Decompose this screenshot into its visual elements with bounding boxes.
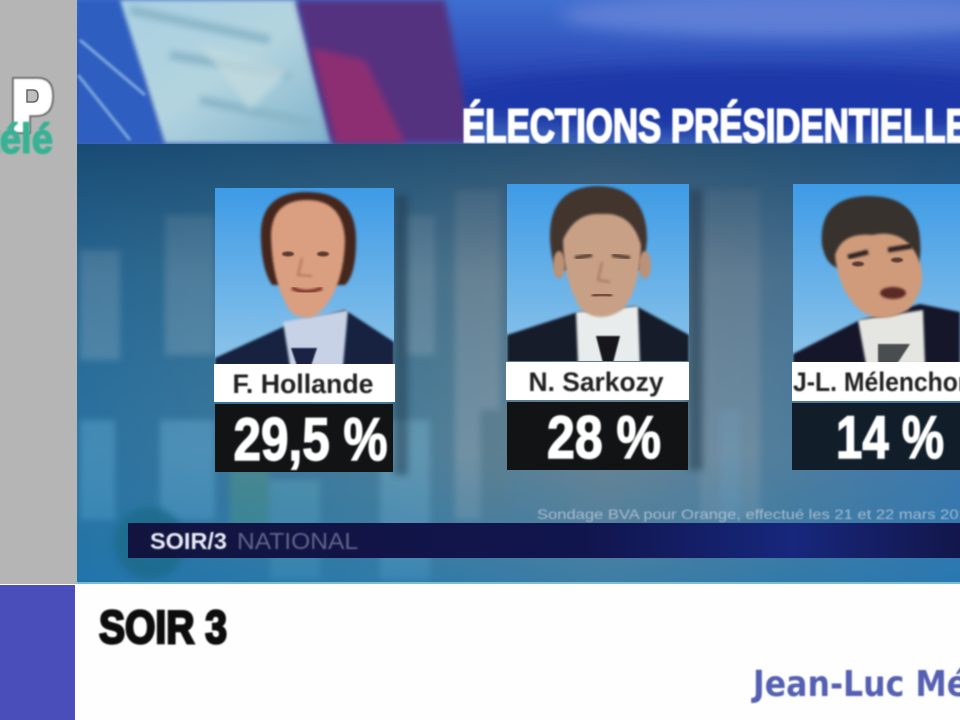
name label xyxy=(506,362,689,400)
sidebar: grey panel xyxy=(0,0,77,584)
panel: building backdrop xyxy=(77,144,960,584)
logo: site logo fragment xyxy=(0,78,53,162)
percentage xyxy=(792,403,960,470)
sidebar: blue panel xyxy=(0,585,75,720)
card: Nicolas Sarkozy: N. Sarkozy xyxy=(528,367,664,397)
card: François Hollande xyxy=(214,188,395,473)
portrait: Mélenchon xyxy=(793,184,960,364)
percentage xyxy=(215,404,393,472)
portrait: Sarkozy xyxy=(507,184,689,363)
heading: Soir 3: SOIR 3 xyxy=(99,601,227,653)
footer panel xyxy=(75,584,960,720)
ticker bar: Soir 3 National xyxy=(128,523,960,558)
card: Jean-Luc Mélenchon xyxy=(792,184,960,471)
ticker bar: Soir 3 National: NATIONAL xyxy=(237,528,358,554)
name label xyxy=(792,362,960,401)
name label xyxy=(214,364,395,402)
card: Nicolas Sarkozy xyxy=(506,184,689,471)
card: François Hollande: F. Hollande xyxy=(232,369,374,399)
portrait: Hollande xyxy=(215,188,394,366)
ticker bar: Soir 3 National: SOIR/3 xyxy=(150,528,227,554)
card: Nicolas Sarkozy: 28 % xyxy=(547,404,661,471)
source note: Sondage BVA pour Orange, effectué les 21 et 22 mars 2012 xyxy=(537,506,960,522)
card: François Hollande: 29,5 % xyxy=(234,406,388,473)
banner: French flag background xyxy=(77,0,960,144)
percentage xyxy=(507,402,688,470)
